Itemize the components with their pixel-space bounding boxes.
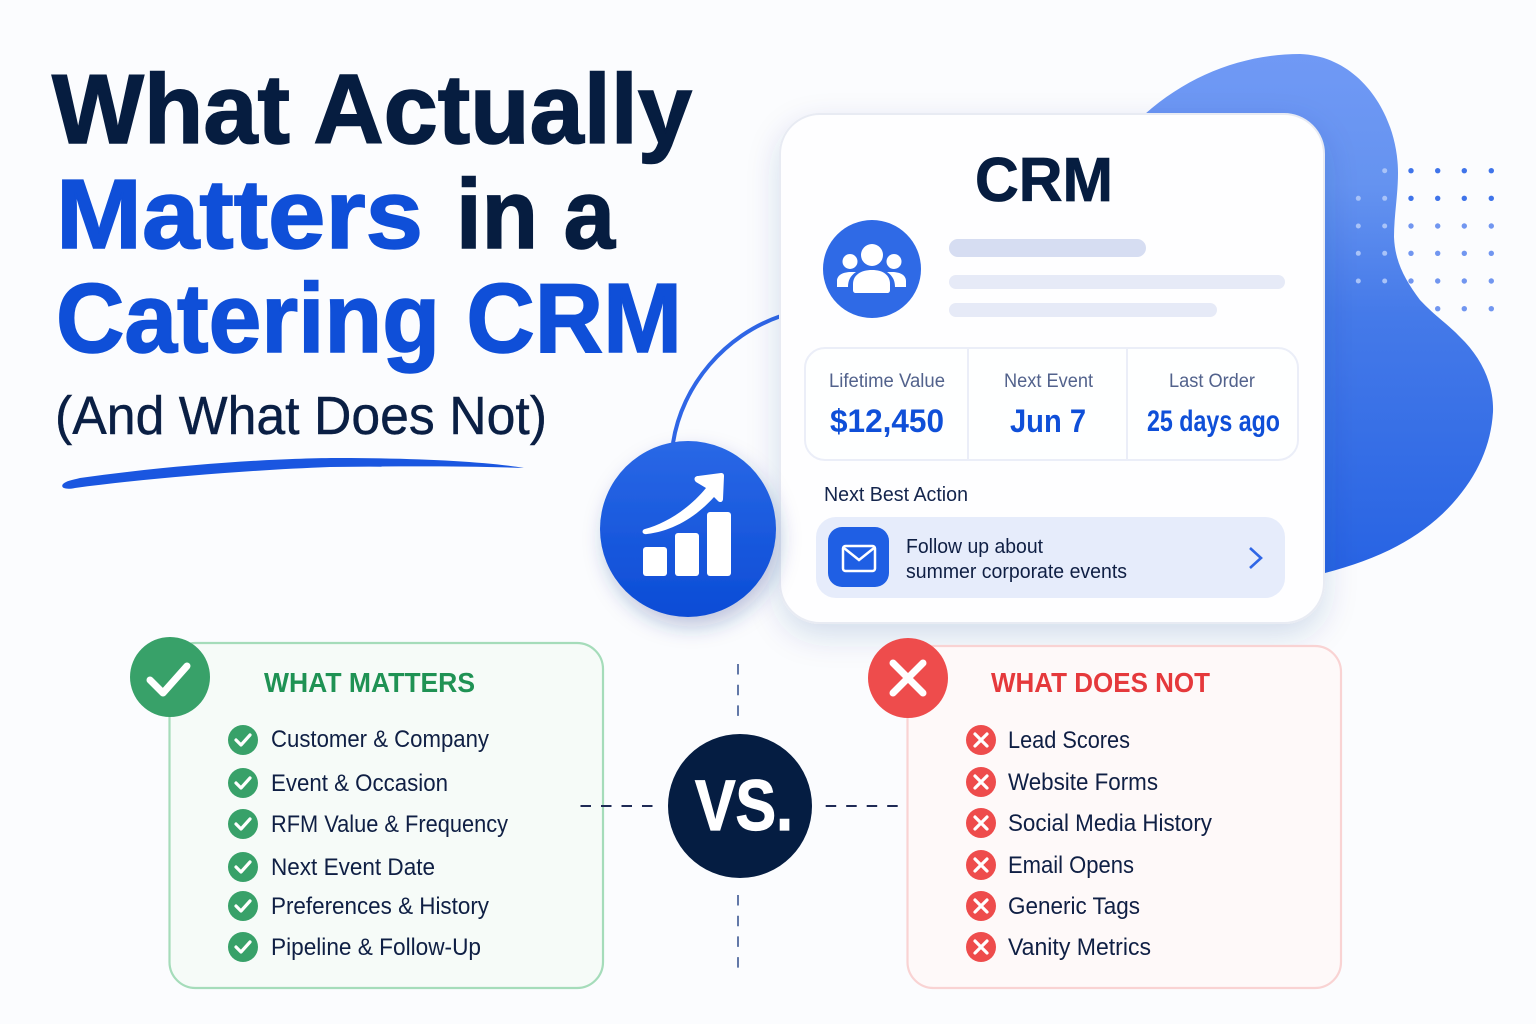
- panel: what does not: [868, 638, 1341, 988]
- stat: next event: [1004, 371, 1094, 439]
- item: social media history: Social Media History: [1008, 810, 1212, 837]
- stat: lifetime value: [829, 371, 945, 439]
- title: Catering CRM: [56, 263, 682, 373]
- icon: growth chart: [600, 441, 776, 617]
- next best action row: [816, 517, 1285, 598]
- dot grid: [1356, 168, 1494, 311]
- item: generic tags: [966, 891, 1140, 921]
- stats panel: [805, 348, 1298, 460]
- stat: last order: 25 days ago: [1147, 405, 1280, 438]
- connector arc: [673, 316, 781, 443]
- title: [52, 54, 692, 373]
- VS badge: VS.: [695, 767, 793, 846]
- icon: envelope: [828, 527, 889, 587]
- item: next event date: [228, 852, 435, 882]
- item: website forms: [966, 767, 1158, 797]
- icon: customer group: [823, 220, 921, 318]
- item: preferences and history: Preferences & History: [271, 893, 489, 920]
- item: next event date: Next Event Date: [271, 854, 435, 881]
- stat: next event: Next Event: [1004, 371, 1094, 392]
- item: email opens: Email Opens: [1008, 852, 1134, 879]
- list: what does not: [966, 725, 1212, 962]
- item: RFM value and frequency: RFM Value & Frequency: [271, 811, 508, 838]
- stat: last order: [1147, 371, 1280, 438]
- item: email opens: [966, 850, 1134, 880]
- item: vanity metrics: Vanity Metrics: [1008, 934, 1151, 961]
- panel: what matters: [130, 637, 603, 988]
- item: lead scores: [966, 725, 1130, 755]
- title: What Actually: [52, 54, 692, 164]
- item: vanity metrics: [966, 932, 1151, 962]
- stat: last order: Last Order: [1169, 371, 1256, 392]
- icon: large check: [130, 637, 210, 717]
- placeholder lines: [949, 239, 1285, 317]
- item: pipeline and follow-up: Pipeline & Follow-Up: [271, 934, 481, 961]
- item: lead scores: Lead Scores: [1008, 727, 1130, 754]
- title: Matters: [56, 159, 423, 269]
- icon: chevron: [1250, 548, 1261, 568]
- decorative blob: [1145, 54, 1493, 573]
- VS badge: [668, 734, 812, 878]
- item: event and occasion: Event & Occasion: [271, 770, 448, 797]
- item: customer and company: Customer & Company: [271, 726, 489, 753]
- action text: summer corporate events: [906, 561, 1127, 583]
- title: in a: [456, 159, 616, 269]
- stat: lifetime value: $12,450: [830, 403, 944, 439]
- item: generic tags: Generic Tags: [1008, 893, 1140, 920]
- subtitle: (And What Does Not): [55, 386, 547, 446]
- item: website forms: Website Forms: [1008, 769, 1158, 796]
- next best action label: Next Best Action: [824, 484, 968, 506]
- icon: large cross: [868, 638, 948, 718]
- what matters heading: WHAT MATTERS: [264, 667, 475, 698]
- list: what matters: [228, 725, 508, 962]
- CRM heading: CRM: [975, 146, 1113, 215]
- item: event and occasion: [228, 768, 448, 798]
- action text: Follow up about: [906, 536, 1043, 558]
- stat: next event: Jun 7: [1010, 403, 1086, 439]
- what does not heading: WHAT DOES NOT: [991, 667, 1210, 698]
- panel: CRM card: [780, 114, 1324, 623]
- title underline: [62, 458, 524, 489]
- stat: lifetime value: Lifetime Value: [829, 371, 945, 392]
